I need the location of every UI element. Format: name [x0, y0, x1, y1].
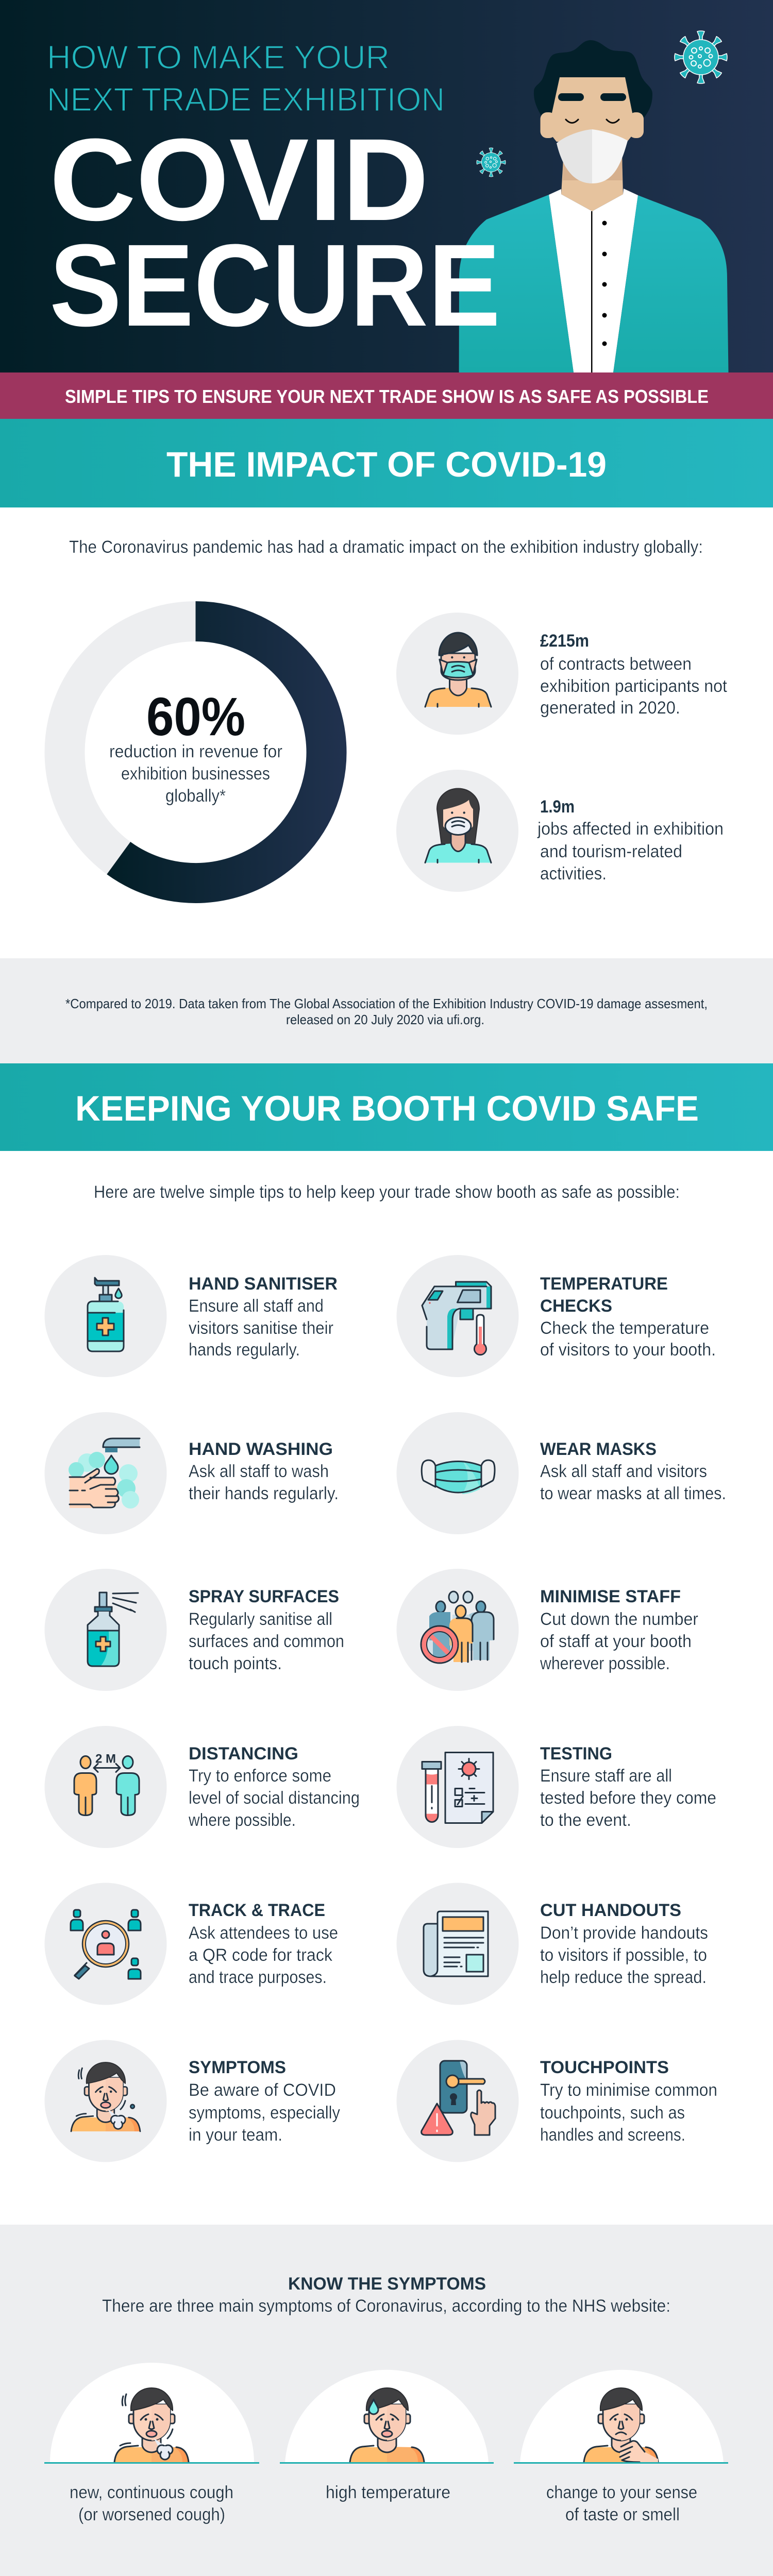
stat text: £215m — [540, 631, 589, 651]
tip text: Don’t provide handouts — [540, 1923, 708, 1943]
tip text: tested before they come — [540, 1788, 716, 1808]
tip text: Check the temperature — [540, 1318, 709, 1338]
tip text — [540, 1587, 698, 1673]
symptom: cough — [44, 2363, 259, 2524]
strapline banner — [0, 372, 773, 419]
stat text: of contracts between — [540, 654, 692, 674]
icon: printed handout — [424, 1911, 488, 1976]
tip text: to wear masks at all times. — [540, 1484, 726, 1503]
tip text: SPRAY SURFACES — [189, 1587, 339, 1606]
tip: symptoms — [44, 2040, 340, 2162]
footnote panel: released on 20 July 2020 via ufi.org. — [286, 1012, 484, 1027]
tip text: surfaces and common — [189, 1632, 344, 1651]
tip text: level of social distancing — [189, 1788, 360, 1808]
tip text: HAND SANITISER — [189, 1274, 338, 1294]
tip text: CHECKS — [540, 1296, 612, 1316]
tip text: in your team. — [189, 2125, 282, 2145]
tip: temperature checks — [397, 1255, 716, 1377]
tip: wear masks — [397, 1412, 726, 1534]
icon: person in surgical mask — [425, 633, 491, 707]
tip text: of visitors to your booth. — [540, 1340, 716, 1360]
stat text — [540, 631, 728, 718]
icon: person in round mask — [425, 788, 491, 862]
caption: (or worsened cough) — [78, 2505, 225, 2524]
stat text: generated in 2020. — [540, 698, 680, 718]
illustration: man wearing a face mask — [459, 40, 729, 372]
tip text: symptoms, especially — [189, 2103, 340, 2123]
caption — [70, 2483, 233, 2524]
tip text: of staff at your booth — [540, 1632, 692, 1651]
header panel — [0, 0, 773, 372]
tip text: HAND WASHING — [189, 1439, 333, 1459]
tip text: hands regularly. — [189, 1340, 300, 1360]
tip: minimise staff — [397, 1569, 698, 1691]
stat text — [537, 797, 724, 884]
tip text — [189, 1439, 339, 1503]
title: SECURE: SECURE — [49, 221, 500, 351]
tip text — [189, 1587, 344, 1673]
panel intro: There are three main symptoms of Coronavirus, according to the NHS website: — [102, 2296, 670, 2316]
tip text: touchpoints, such as — [540, 2103, 685, 2123]
tip text — [540, 1901, 708, 1987]
icon: washing hands under tap — [69, 1438, 140, 1509]
icon: infrared thermometer — [422, 1282, 491, 1355]
title: COVID: COVID — [49, 115, 429, 245]
caption: new, continuous cough — [70, 2483, 233, 2502]
heading: keeping your booth covid safe: KEEPING YOUR BOOTH COVID SAFE — [75, 1089, 699, 1128]
tip text: Try to minimise common — [540, 2080, 717, 2100]
caption: of taste or smell — [565, 2505, 680, 2524]
tip text: visitors sanitise their — [189, 1318, 333, 1338]
tip text — [188, 1744, 360, 1830]
icon: blood test and report — [422, 1753, 493, 1823]
tip text: Try to enforce some — [189, 1766, 331, 1786]
icon: large virus — [675, 31, 727, 83]
donut caption: globally* — [165, 786, 226, 806]
stat text: jobs affected in exhibition — [537, 819, 724, 839]
caption — [546, 2483, 697, 2524]
caption: change to your sense — [546, 2483, 697, 2502]
icon: small virus — [477, 148, 506, 177]
title line one: HOW TO MAKE YOUR — [47, 39, 390, 76]
tip text: TRACK & TRACE — [189, 1901, 325, 1920]
tip: testing — [397, 1726, 716, 1848]
tip text: handles and screens. — [540, 2125, 685, 2145]
stat text: and tourism-related — [540, 842, 682, 861]
stat text: exhibition participants not — [540, 676, 728, 696]
tip: distancing — [44, 1726, 360, 1848]
tip text — [540, 1274, 716, 1360]
symptom: high temperature — [280, 2370, 494, 2502]
tip text — [189, 2058, 340, 2145]
tip text: Ask attendees to use — [189, 1923, 338, 1943]
tip text — [540, 2058, 717, 2145]
tip text: CUT HANDOUTS — [540, 1901, 681, 1920]
icon: sweating man — [350, 2388, 424, 2462]
tip: spray surfaces — [44, 1569, 344, 1691]
donut caption: exhibition businesses — [121, 764, 270, 784]
tip text: Be aware of COVID — [189, 2080, 336, 2100]
icon: magnifying glass over people — [71, 1910, 141, 1979]
label: 2 M: 2 M — [95, 1752, 116, 1766]
panel: know the symptoms — [0, 2225, 773, 2576]
donut caption: reduction in revenue for — [109, 742, 282, 761]
tip text — [189, 1901, 338, 1987]
tip text: to the event. — [540, 1810, 631, 1830]
icon: coughing man — [71, 2062, 140, 2131]
tip text: to visitors if possible, to — [540, 1945, 707, 1965]
icon: spray bottle — [88, 1592, 138, 1666]
stat text: 1.9m — [540, 797, 575, 817]
stat text: activities. — [540, 864, 607, 884]
tip: hand washing — [44, 1412, 339, 1534]
icon: surgical mask — [422, 1460, 495, 1494]
tip text: and trace purposes. — [189, 1968, 327, 1987]
icon: two people two metres apart — [74, 1752, 139, 1816]
tip text — [540, 1744, 716, 1830]
tip text: TESTING — [540, 1744, 612, 1764]
tip text: Ensure all staff and — [189, 1296, 324, 1316]
tip text: Ask all staff and visitors — [540, 1462, 707, 1481]
donut caption — [109, 742, 282, 806]
heading: the impact of covid-19: THE IMPACT OF COVID-19 — [166, 445, 607, 484]
heading: the impact of covid-19 — [0, 419, 773, 507]
panel heading: KNOW THE SYMPTOMS — [288, 2274, 486, 2294]
donut chart: 60 percent — [65, 621, 327, 883]
icon: door handle, warning sign and finger — [422, 2061, 495, 2135]
tip text — [189, 1274, 338, 1360]
tip: hand sanitiser — [44, 1255, 338, 1377]
tip text: help reduce the spread. — [540, 1968, 707, 1987]
impact intro text: The Coronavirus pandemic has had a dramatic impact on the exhibition industry globally: — [69, 537, 703, 557]
title line two: NEXT TRADE EXHIBITION — [47, 81, 445, 118]
footnote panel — [0, 958, 773, 1063]
stat: jobs — [396, 770, 724, 892]
tip text: MINIMISE STAFF — [540, 1587, 681, 1606]
tip: touchpoints — [397, 2040, 717, 2162]
stat: contracts — [396, 613, 728, 735]
footnote panel: *Compared to 2019. Data taken from The Global Association of the Exhibition Industry COVID-19 damage assesment, — [65, 996, 708, 1011]
strapline banner: SIMPLE TIPS TO ENSURE YOUR NEXT TRADE SHOW IS AS SAFE AS POSSIBLE — [65, 386, 709, 407]
icon: group of staff with prohibition sign — [421, 1591, 494, 1663]
icon: man holding throat — [584, 2388, 658, 2462]
tips intro text: Here are twelve simple tips to help keep your trade show booth as safe as possible: — [94, 1182, 680, 1202]
tip text: where possible. — [188, 1810, 296, 1830]
tip text: SYMPTOMS — [189, 2058, 286, 2077]
tip text: Ask all staff to wash — [189, 1462, 329, 1481]
caption: high temperature — [326, 2483, 450, 2502]
tip text: touch points. — [189, 1654, 282, 1673]
tip text: their hands regularly. — [189, 1484, 339, 1503]
tip text: Ensure staff are all — [540, 1766, 672, 1786]
tip: track and trace — [44, 1883, 338, 2005]
tip text: Regularly sanitise all — [189, 1609, 332, 1629]
tip text: Cut down the number — [540, 1609, 698, 1629]
icon: pump bottle — [88, 1278, 124, 1351]
tip text: TOUCHPOINTS — [540, 2058, 669, 2077]
tip text: wherever possible. — [540, 1654, 670, 1673]
tip: cut handouts — [397, 1883, 708, 2005]
tip text: TEMPERATURE — [540, 1274, 668, 1294]
stat: 60%: 60% — [146, 687, 245, 747]
icon: coughing man — [114, 2388, 189, 2462]
tip text: WEAR MASKS — [540, 1439, 657, 1459]
tip text: DISTANCING — [189, 1744, 298, 1764]
tip text: a QR code for track — [189, 1945, 333, 1965]
heading: keeping your booth covid safe — [0, 1063, 773, 1151]
tip text — [540, 1439, 726, 1503]
symptom: change to taste or smell — [514, 2370, 728, 2524]
